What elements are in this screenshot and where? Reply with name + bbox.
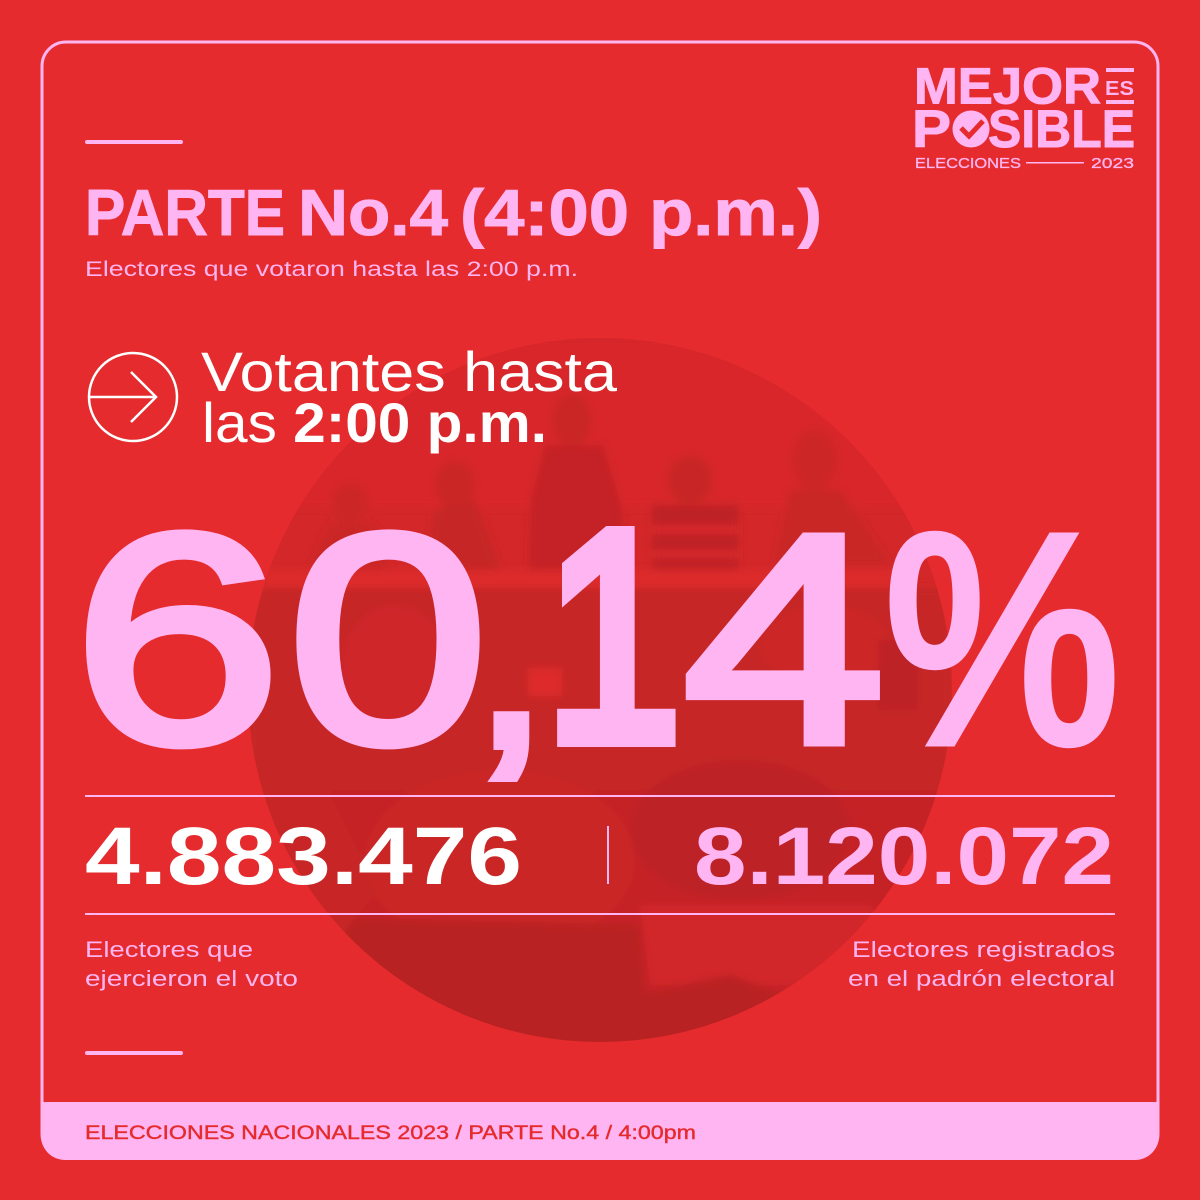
caption: voters: ejercieron el voto bbox=[85, 966, 298, 991]
registered count: 8.120.072 bbox=[694, 811, 1114, 902]
big percentage: 4 bbox=[683, 473, 885, 806]
logo bbox=[912, 58, 1135, 172]
footer text: ELECCIONES NACIONALES 2023 / PARTE No.4 / 4:00pm bbox=[85, 1122, 696, 1144]
big percentage: 1 bbox=[545, 469, 681, 802]
caption: voters bbox=[85, 937, 298, 991]
heading: voters until 2pm: las 2:00 p.m. bbox=[202, 391, 547, 454]
bottom accent line bbox=[85, 1051, 183, 1055]
title bbox=[85, 176, 822, 249]
logo: MEJOR bbox=[914, 58, 1101, 114]
big percentage bbox=[73, 469, 1120, 806]
photo circle: people at polling station bbox=[240, 338, 952, 1060]
title: PARTE bbox=[85, 176, 285, 249]
logo: ES bbox=[1105, 78, 1134, 100]
footer band bbox=[41, 1102, 1159, 1160]
rule below numbers bbox=[85, 913, 1115, 915]
caption: registered: Electores registrados bbox=[852, 937, 1115, 962]
logo: SIBLE bbox=[988, 100, 1135, 159]
big percentage: , bbox=[476, 518, 546, 797]
caption: voters: Electores que bbox=[85, 937, 253, 962]
title: (4:00 p.m.) bbox=[460, 176, 822, 249]
subtitle: Electores que votaron hasta las 2:00 p.m. bbox=[85, 258, 578, 281]
voters count: 4.883.476 bbox=[85, 811, 522, 902]
top accent line bbox=[85, 140, 183, 144]
rule above numbers bbox=[85, 795, 1115, 797]
caption: registered bbox=[848, 937, 1115, 991]
logo: 2023 bbox=[1091, 155, 1134, 172]
heading: voters until 2pm: Votantes hasta bbox=[201, 340, 618, 403]
number divider bbox=[607, 826, 609, 884]
icon: arrow in circle bbox=[89, 353, 177, 441]
caption: registered: en el padrón electoral bbox=[848, 966, 1115, 991]
big percentage: % bbox=[884, 473, 1120, 805]
logo: ELECCIONES bbox=[915, 155, 1021, 172]
big percentage: 0 bbox=[288, 474, 488, 806]
logo: P bbox=[912, 100, 951, 159]
title: No.4 bbox=[298, 176, 448, 249]
big percentage: 6 bbox=[73, 472, 281, 805]
heading: voters until 2pm bbox=[201, 340, 618, 454]
